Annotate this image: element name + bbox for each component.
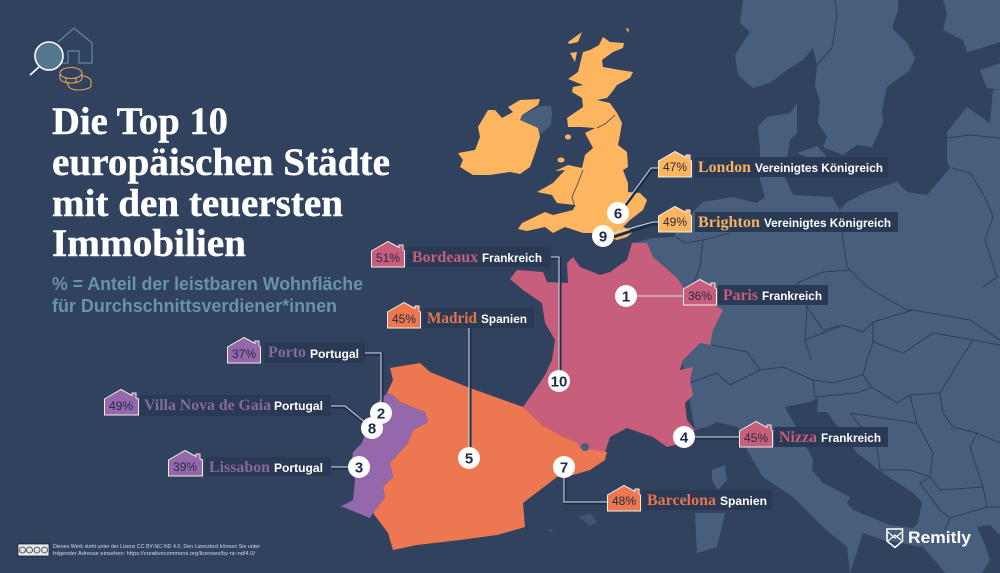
label: Porto [228, 338, 365, 363]
number markers: 1 [622, 288, 630, 306]
label: Bordeaux: Frankreich [482, 251, 542, 265]
label: Brighton: Brighton [698, 214, 760, 231]
subtitle: für Durchschnittsverdiener*innen [52, 296, 337, 316]
label: Nizza: Frankreich [821, 431, 881, 445]
label: Paris: Frankreich [762, 289, 822, 303]
license text [53, 544, 260, 557]
title: europäischen Städte [52, 141, 390, 184]
number markers: 5 [465, 450, 473, 468]
label: Nizza [740, 422, 888, 447]
label: Porto: 37% [232, 347, 256, 361]
label: Brighton: Vereinigtes Königreich [764, 216, 891, 230]
license text: Dieses Werk steht unter der Lizenz CC BY-NC-ND 4.0. Den Lizenztext können Sie unter [53, 544, 260, 550]
title: Immobilien [52, 222, 246, 265]
number markers: 9 [599, 228, 607, 246]
label: Paris: 36% [688, 289, 712, 303]
number markers: 2 [377, 406, 385, 422]
label: Brighton: 49% [663, 215, 687, 229]
subtitle: % = Anteil der leistbaren Wohnfläche [52, 274, 363, 294]
map: United Kingdom [518, 28, 647, 240]
connector lines [331, 168, 739, 503]
license badge [18, 544, 49, 556]
icon: magnifier, house and coins [30, 28, 92, 90]
number markers: 4 [680, 430, 689, 446]
label: Nizza: 45% [744, 431, 768, 445]
number markers: 6 [614, 206, 622, 222]
label: London: Vereinigtes Königreich [755, 161, 883, 175]
label: Madrid [388, 302, 534, 328]
label: Madrid: Spanien [481, 312, 527, 326]
map: background land of Europe [548, 0, 1000, 573]
label: Madrid: 45% [392, 312, 416, 326]
logo: Remitly: Remitly [908, 528, 972, 547]
label: Paris [684, 280, 828, 305]
subtitle [52, 274, 363, 316]
label: Brighton [658, 206, 898, 232]
map: Spain [373, 363, 607, 550]
label: London: London [698, 159, 751, 176]
map: Ireland [458, 99, 552, 175]
label: Paris: Paris [723, 287, 758, 304]
label: Villa Nova de Gaia: 49% [109, 399, 133, 413]
map: Portugal [340, 393, 428, 518]
label: Villa Nova de Gaia: Villa Nova de Gaia [144, 397, 271, 414]
title: Die Top 10 [52, 100, 228, 143]
label: Villa Nova de Gaia [104, 390, 331, 416]
label: Lissabon [168, 450, 331, 476]
label: Barcelona: Spanien [720, 494, 767, 508]
label: Bordeaux: Bordeaux [412, 249, 478, 266]
title [52, 100, 390, 265]
label: Bordeaux [372, 242, 551, 267]
label: Lissabon: 39% [173, 460, 197, 474]
label: Lissabon: Lissabon [209, 459, 270, 476]
number markers: 10 [551, 374, 567, 390]
label: Villa Nova de Gaia: Portugal [274, 399, 323, 413]
number markers: 3 [355, 460, 363, 476]
title: mit den teuersten [52, 182, 343, 225]
label: Bordeaux: 51% [376, 251, 400, 265]
label: Porto: Porto [268, 344, 306, 361]
label: Nizza: Nizza [779, 429, 817, 446]
label: Barcelona: Barcelona [647, 492, 716, 509]
label: Madrid: Madrid [427, 310, 477, 327]
label: Lissabon: Portugal [274, 461, 323, 475]
label: Porto: Portugal [310, 347, 359, 361]
map: France [510, 243, 723, 452]
label: London: 47% [663, 160, 687, 174]
label: Barcelona [608, 486, 772, 511]
number markers [348, 202, 695, 478]
license text: folgender Adresse einsehen: https://creativecommons.org/licenses/by-nc-nd/4.0/ [53, 551, 255, 557]
number markers: 8 [368, 420, 376, 438]
number markers: 7 [560, 460, 568, 476]
label: Barcelona: 48% [612, 494, 636, 508]
label: London [658, 152, 888, 177]
